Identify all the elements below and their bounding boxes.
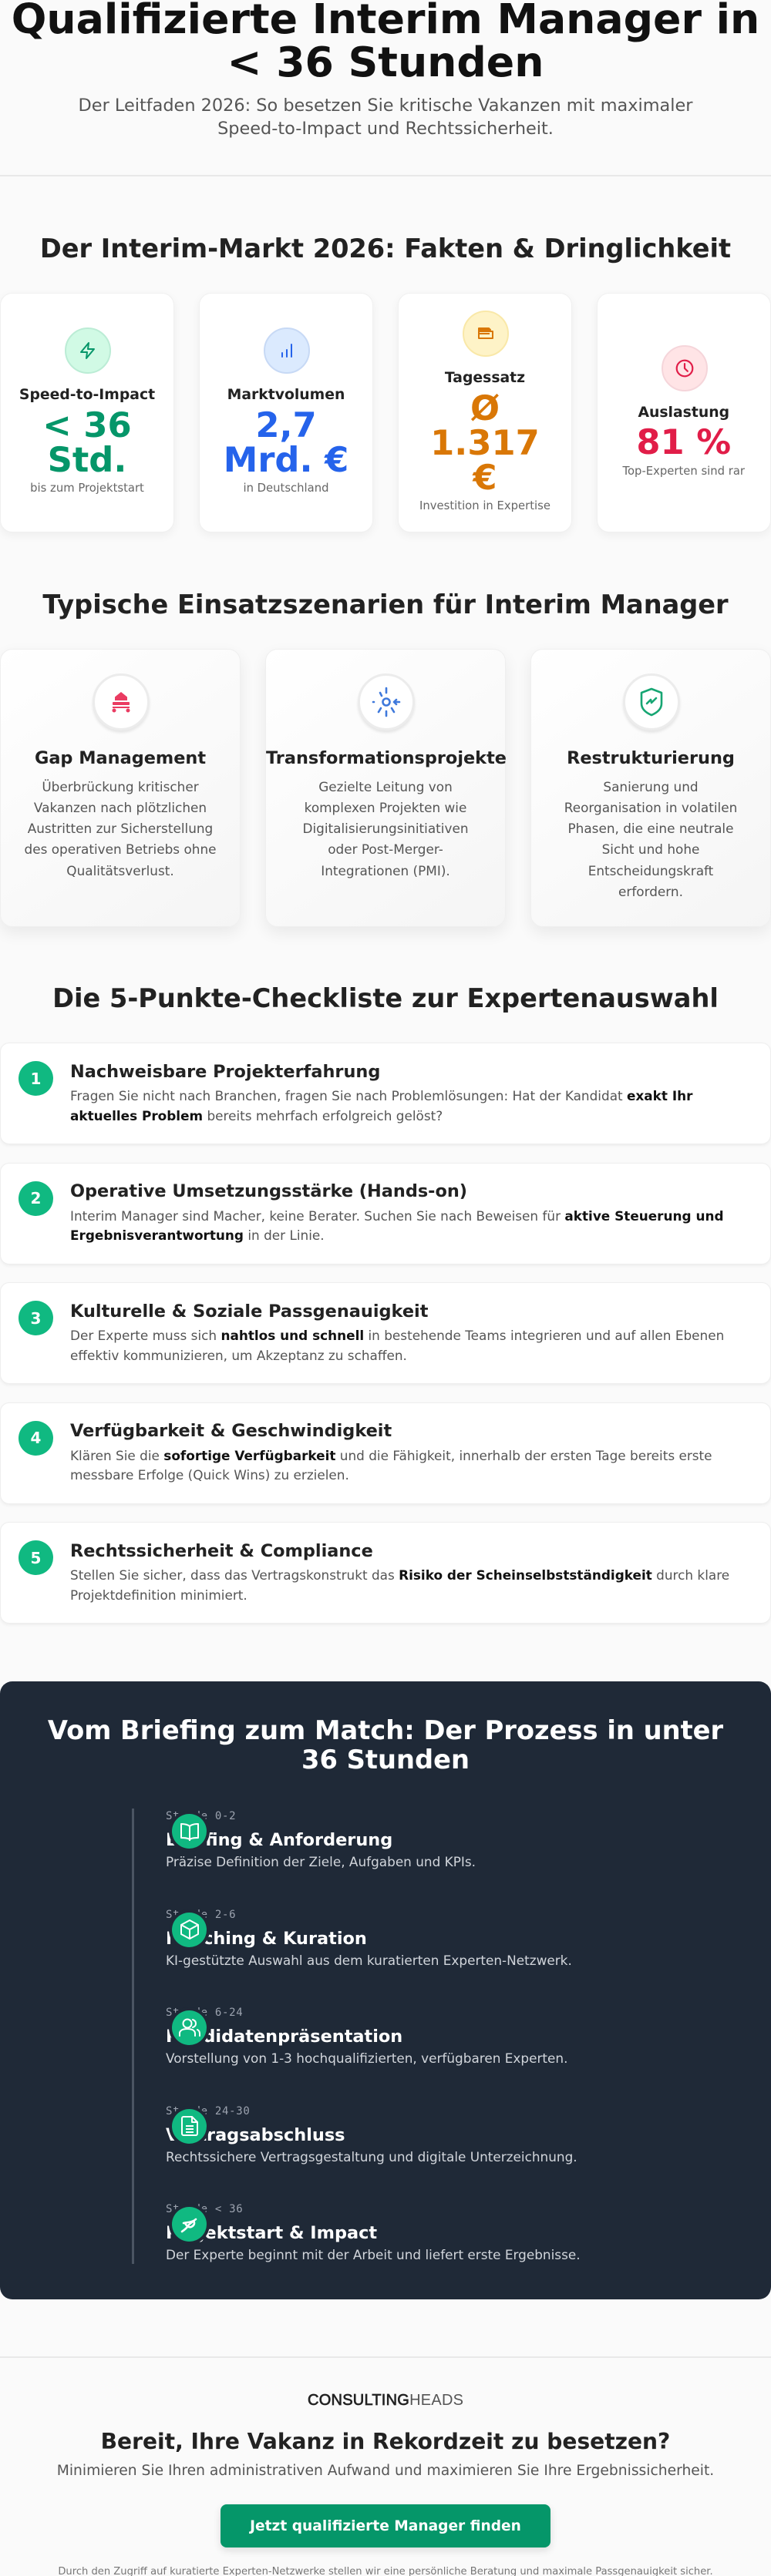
header [0, 0, 771, 176]
step text: Der Experte beginnt mit der Arbeit und liefert erste Ergebnisse. [166, 2247, 581, 2262]
item text: Ergebnisverantwortung in der Linie. [70, 1228, 325, 1243]
item title: Nachweisbare Projekterfahrung [70, 1062, 380, 1082]
card text: Phasen, die eine neutrale [567, 821, 734, 836]
time label: Stunde < 36 [166, 2203, 243, 2215]
heading: scenarios: Typische Einsatzszenarien für Interim Manager [42, 589, 729, 620]
step title: Vertragsabschluss [166, 2125, 345, 2145]
item text: Stellen Sie sicher, dass das Vertragskonstrukt das Risiko der Scheinselbstständigkeit durch klare [70, 1567, 729, 1583]
step text: Präzise Definition der Ziele, Aufgaben und KPIs. [166, 1854, 476, 1869]
label: Marktvolumen [227, 387, 345, 403]
item text: Projektdefinition minimiert. [70, 1587, 247, 1603]
panel: scenario cards [0, 649, 771, 933]
item text [70, 1567, 729, 1603]
value: Ø [470, 388, 500, 428]
item title: Kulturelle & Soziale Passgenauigkeit [70, 1301, 428, 1322]
label: Tagessatz [445, 370, 525, 386]
value: 2,7 [255, 405, 317, 445]
button: Jetzt qualifizierte Manager finden [250, 2518, 521, 2534]
item text: Klären Sie die sofortige Verfügbarkeit und die Fähigkeit, innerhalb der ersten Tage bereits erste [70, 1448, 712, 1463]
call to action text: Minimieren Sie Ihren administrativen Aufwand und maximieren Sie Ihre Ergebnissicherheit. [57, 2463, 714, 2479]
step 2 [166, 1909, 572, 1968]
step text: KI-gestützte Auswahl aus dem kuratierten Experten-Netzwerk. [166, 1953, 572, 1968]
panel: checklist [0, 1043, 771, 1624]
process heading [48, 1715, 723, 1775]
number badge [19, 1421, 53, 1456]
step title: Matching & Kuration [166, 1929, 367, 1949]
logo: CONSULTINGHEADS [308, 2392, 463, 2409]
card text: Qualitätsverlust. [66, 863, 174, 878]
time label: Stunde 6-24 [166, 2007, 243, 2019]
panel: process timeline [0, 1681, 771, 2299]
value [42, 405, 132, 480]
card text: Überbrückung kritischer [42, 778, 199, 794]
item title: Operative Umsetzungsstärke (Hands-on) [70, 1181, 467, 1201]
icon: shield [623, 673, 680, 730]
icon: document [172, 2109, 207, 2144]
card text [564, 778, 737, 899]
item text: messbare Erfolge (Quick Wins) zu erzielen. [70, 1467, 349, 1483]
item text: Der Experte muss sich nahtlos und schnell in bestehende Teams integrieren und auf allen Ebenen [70, 1328, 724, 1343]
stat card: market volume [199, 293, 373, 532]
card text: Vakanzen nach plötzlichen [34, 800, 207, 815]
number badge [19, 1181, 53, 1216]
checklist item 1 [0, 1043, 771, 1144]
time label: Stunde 24-30 [166, 2105, 251, 2118]
icon: users [172, 2010, 207, 2045]
subtitle: Der Leitfaden 2026: So besetzen Sie kritische Vakanzen mit maximaler [79, 96, 692, 116]
card text: oder Post-Merger- [328, 841, 443, 857]
label: Auslastung [638, 405, 729, 421]
value: Mrd. € [224, 439, 348, 480]
item text [70, 1088, 692, 1123]
step 3 [166, 2007, 567, 2066]
item title: Verfügbarkeit & Geschwindigkeit [70, 1421, 392, 1441]
checklist item 2 [0, 1163, 771, 1264]
card text: Sanierung und [603, 778, 699, 794]
footer [0, 2356, 771, 2576]
icon: spark [358, 673, 415, 730]
button [221, 2504, 550, 2547]
step title: Kandidatenpräsentation [166, 2027, 402, 2047]
number badge [19, 1301, 53, 1335]
subtitle: Speed-to-Impact und Rechtssicherheit. [217, 119, 554, 139]
value: Std. [48, 439, 126, 480]
title [12, 0, 759, 86]
title: < 36 Stunden [227, 38, 544, 86]
item title: Rechtssicherheit & Compliance [70, 1541, 373, 1561]
process heading: 36 Stunden [301, 1745, 470, 1775]
card text [25, 778, 216, 878]
subtitle [79, 96, 692, 139]
card text: Gezielte Leitung von [318, 778, 453, 794]
stat card: speed to impact [0, 293, 174, 532]
value: € [473, 457, 497, 498]
time label: Stunde 2-6 [166, 1909, 236, 1921]
value: 1.317 [430, 422, 540, 463]
card title: Transformationsprojekte [266, 748, 507, 768]
caption: Investition in Expertise [419, 499, 550, 512]
card text: Austritten zur Sicherstellung [28, 821, 213, 836]
card text: Reorganisation in volatilen [564, 800, 737, 815]
heading: market facts: Der Interim-Markt 2026: Fakten & Dringlichkeit [40, 233, 731, 264]
number badge [19, 1061, 53, 1096]
value: 81 % [636, 421, 731, 462]
scenario card: gap management [0, 649, 241, 927]
scenario card: transformation [265, 649, 506, 927]
card text: Integrationen (PMI). [321, 863, 450, 878]
stat card: utilisation [597, 293, 771, 532]
card text: Sicht und hohe [602, 841, 699, 857]
card text: komplexen Projekten wie [305, 800, 466, 815]
step 4 [166, 2105, 577, 2165]
number badge [19, 1540, 53, 1575]
icon: lightning [65, 327, 111, 374]
icon: car [93, 673, 150, 730]
icon: wallet [463, 311, 509, 357]
number badge: 5 [31, 1549, 41, 1567]
scenario card: restructuring [530, 649, 771, 927]
checklist item 3 [0, 1282, 771, 1384]
card text: Entscheidungskraft [588, 863, 713, 878]
card text: erfordern. [618, 884, 683, 899]
card title: Gap Management [35, 748, 206, 768]
card text: Digitalisierungsinitiativen [302, 821, 469, 836]
icon: box [172, 1913, 207, 1947]
item text: aktuelles Problem bereits mehrfach erfolgreich gelöst? [70, 1108, 443, 1123]
card title: Restrukturierung [567, 748, 735, 768]
number badge: 2 [31, 1189, 41, 1207]
step text: Rechtssichere Vertragsgestaltung und digitale Unterzeichnung. [166, 2149, 577, 2165]
process heading: Vom Briefing zum Match: Der Prozess in unter [48, 1715, 723, 1745]
checklist item 4 [0, 1402, 771, 1504]
card text [302, 778, 469, 878]
card text: des operativen Betriebs ohne [25, 841, 216, 857]
timeline line [132, 1809, 134, 2264]
icon: bars [264, 327, 310, 374]
step text: Vorstellung von 1-3 hochqualifizierten, verfügbaren Experten. [166, 2050, 567, 2066]
step 5 [166, 2203, 581, 2262]
label: Speed-to-Impact [19, 387, 155, 403]
icon: handshake [172, 2207, 207, 2242]
number badge: 1 [31, 1070, 41, 1088]
panel: stat cards [0, 293, 771, 533]
icon: clock [662, 345, 708, 391]
caption: in Deutschland [243, 482, 329, 495]
item text: effektiv kommunizieren, um Akzeptanz zu schaffen. [70, 1348, 407, 1363]
item text: Fragen Sie nicht nach Branchen, fragen Sie nach Problemlösungen: Hat der Kandidat exakt Ihr [70, 1088, 692, 1103]
step 1 [166, 1810, 476, 1869]
stat card: daily rate [398, 293, 572, 532]
step title: Briefing & Anforderung [166, 1830, 392, 1850]
item text [70, 1208, 724, 1243]
caption: Top-Experten sind rar [622, 465, 745, 478]
item text: Interim Manager sind Macher, keine Berater. Suchen Sie nach Beweisen für aktive Steuerung und [70, 1208, 724, 1224]
caption: bis zum Projektstart [30, 482, 144, 495]
heading: checklist: Die 5-Punkte-Checkliste zur Expertenauswahl [52, 983, 719, 1013]
value [430, 388, 540, 498]
value: < 36 [42, 405, 132, 445]
item text [70, 1448, 712, 1483]
checklist item 5 [0, 1522, 771, 1624]
value [224, 405, 348, 480]
item text [70, 1328, 724, 1363]
number badge: 4 [31, 1429, 41, 1447]
call to action heading: Bereit, Ihre Vakanz in Rekordzeit zu besetzen? [101, 2429, 670, 2454]
time label: Stunde 0-2 [166, 1810, 236, 1822]
icon: book [172, 1814, 207, 1849]
step title: Projektstart & Impact [166, 2223, 377, 2243]
number badge: 3 [31, 1309, 41, 1328]
